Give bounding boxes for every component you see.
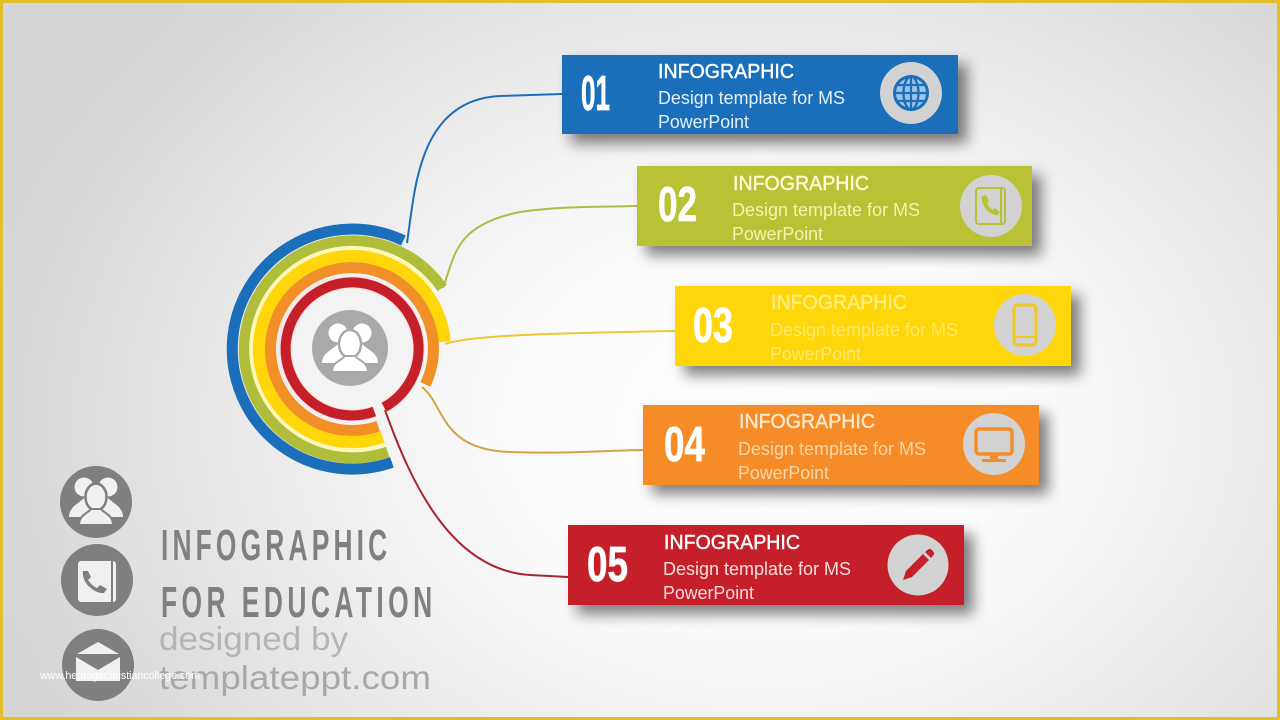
- ring: red outline: [286, 282, 419, 415]
- ring: green: [244, 241, 442, 458]
- credit: designed by: designed by: [159, 620, 349, 657]
- card 05 description: Design template for MS: [663, 559, 851, 579]
- icon: envelope badge: [62, 629, 134, 701]
- card 04 title: INFOGRAPHIC: [739, 411, 875, 433]
- card 05 title: INFOGRAPHIC: [664, 532, 800, 554]
- connector: blue line: [407, 94, 562, 243]
- ring: orange: [270, 268, 433, 431]
- ring: blue: [232, 229, 403, 469]
- card 02 description: [732, 200, 920, 244]
- card 05 description: PowerPoint: [663, 583, 754, 603]
- icon: smartphone: [994, 294, 1056, 356]
- credit: designed by: [159, 620, 431, 696]
- icon: people badge: [60, 466, 132, 538]
- card 01: [562, 55, 967, 143]
- card 01 description: PowerPoint: [658, 112, 749, 132]
- connector: red line: [385, 410, 568, 577]
- icon: people centre: [312, 310, 388, 386]
- card 01 description: Design template for MS: [658, 88, 845, 108]
- card 02 title: INFOGRAPHIC: [733, 173, 869, 195]
- number 01: 01: [581, 67, 610, 121]
- connector: orange line: [422, 387, 643, 453]
- icon: pencil: [888, 534, 948, 596]
- card 04 description: [738, 439, 926, 483]
- heading: infographic for education: FOR EDUCATION: [161, 577, 432, 627]
- card 04 description: PowerPoint: [738, 463, 829, 483]
- icon: phone book: [960, 175, 1022, 237]
- credit: designed by: templateppt.com: [159, 659, 431, 696]
- card 04: [643, 405, 1048, 494]
- icon: phone book badge: [61, 544, 133, 616]
- connector: yellow line: [445, 331, 675, 344]
- card 03: [675, 286, 1080, 375]
- heading: infographic for education: [161, 520, 432, 627]
- card 05: [568, 525, 973, 614]
- ring: yellow: [259, 256, 445, 442]
- card 02 description: Design template for MS: [732, 200, 920, 220]
- icon: globe: [880, 62, 942, 124]
- card 03 description: Design template for MS: [770, 320, 958, 340]
- card 03 description: PowerPoint: [770, 344, 861, 364]
- watermark: www.heritagechristiancollege.com: [39, 670, 200, 682]
- concentric ring diagram: [232, 229, 445, 469]
- card 01 description: [658, 88, 845, 132]
- ring: red: [286, 282, 419, 415]
- card 02: [637, 166, 1041, 255]
- card 04 description: Design template for MS: [738, 439, 926, 459]
- card 02 description: PowerPoint: [732, 224, 823, 244]
- card 01 title: INFOGRAPHIC: [658, 61, 794, 83]
- number 02: 02: [658, 178, 697, 232]
- card 03 title: INFOGRAPHIC: [771, 292, 907, 314]
- number 04: 04: [664, 418, 705, 472]
- center disc: [292, 289, 412, 409]
- number 05: 05: [587, 538, 628, 592]
- heading: infographic for education: INFOGRAPHIC: [161, 520, 387, 570]
- ring: yellow cream edge: [251, 248, 432, 450]
- connector: green line: [443, 206, 637, 288]
- icon: monitor: [963, 413, 1025, 475]
- number 03: 03: [693, 299, 733, 353]
- card 05 description: [663, 559, 851, 603]
- card 03 description: [770, 320, 958, 364]
